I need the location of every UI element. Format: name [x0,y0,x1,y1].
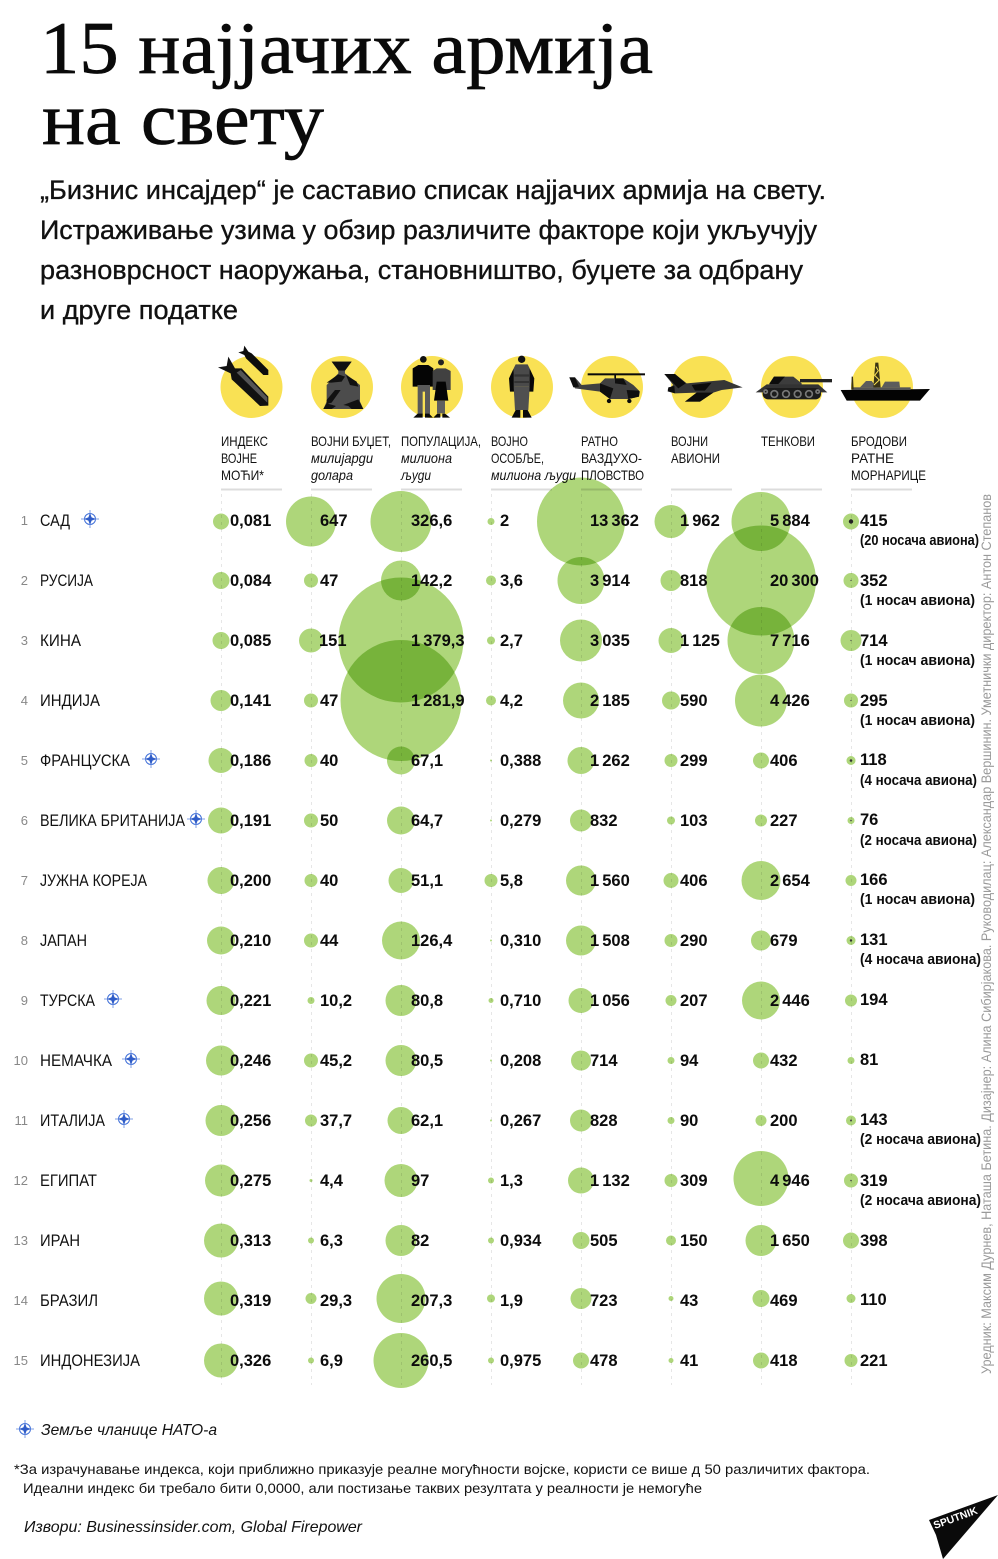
row 14: БРАЗИЛ: 469 [770,1292,798,1310]
row 13: ИРАН: 398 [860,1232,888,1250]
row 9: ТУРСКА: 194 [860,991,888,1009]
row 2: РУСИЈА [21,571,975,609]
bubbles: navy [840,514,862,1367]
row 5: ФРАНЦУСКА: 0,186 [230,752,271,770]
icon: warship [841,363,930,401]
header: navy: МОРНАРИЦЕ [851,467,926,483]
row 9: ТУРСКА: 2 446 [770,992,810,1010]
row 4: ИНДИЈА: 47 [320,692,338,710]
row 10: НЕМАЧКА: 80,5 [411,1052,443,1070]
row 12: ЕГИПАТ: 319 [860,1172,888,1190]
row 4: ИНДИЈА: ИНДИЈА [40,691,101,710]
header: navy [851,433,926,483]
row 7: ЈУЖНА КОРЕЈА: 51,1 [411,872,443,890]
header: air force: ВАЗДУХО- [581,450,642,466]
row 14: БРАЗИЛ: 29,3 [320,1292,352,1310]
bubbles: military personnel [484,518,498,1364]
row 9: ТУРСКА: ТУРСКА [40,991,96,1010]
row 4: ИНДИЈА: 0,141 [230,692,271,710]
bubbles: air force [537,478,625,1368]
row 15: ИНДОНЕЗИЈА: 221 [860,1352,888,1370]
header: personnel: милиона људи [491,467,576,483]
row 8: ЈАПАН: 126,4 [411,932,453,950]
row 9: ТУРСКА: 9 [21,993,28,1008]
row 12: ЕГИПАТ: 4,4 [320,1172,344,1190]
row 1: САД: САД [40,511,70,530]
row 3: КИНА [21,631,975,669]
row 8: ЈАПАН: ЈАПАН [40,931,87,950]
icon: helicopter [569,373,645,403]
row 5: ФРАНЦУСКА: 0,388 [500,752,541,770]
row 15: ИНДОНЕЗИЈА: 6,9 [320,1352,343,1370]
row 13: ИРАН: 505 [590,1232,618,1250]
row 12: ЕГИПАТ: 309 [680,1172,708,1190]
row 14: БРАЗИЛ: 723 [590,1292,618,1310]
row 11: ИТАЛИЈА: 0,256 [230,1112,271,1130]
row 9: ТУРСКА: 207 [680,992,708,1010]
row 2: РУСИЈА: 3,6 [500,572,523,590]
row 4: ИНДИЈА: 4,2 [500,692,523,710]
row 2: РУСИЈА: (1 носач авиона) [860,592,975,609]
row 14: БРАЗИЛ: БРАЗИЛ [40,1291,98,1310]
row 8: ЈАПАН: 8 [21,933,28,948]
row 10: НЕМАЧКА: 81 [860,1051,878,1069]
row 5: ФРАНЦУСКА [21,750,977,789]
row 6: ВЕЛИКА БРИТАНИЈА: 103 [680,812,708,830]
icon: yellow circle backgrounds [220,356,913,418]
row 10: НЕМАЧКА: НЕМАЧКА [40,1051,113,1070]
row 15: ИНДОНЕЗИЈА: 478 [590,1352,618,1370]
bubbles: military budget [286,496,336,1364]
icon: NATO member [122,1050,140,1068]
row 8: ЈАПАН: 131 [860,931,888,949]
row 3: КИНА: 3 [21,633,28,648]
row 15: ИНДОНЕЗИЈА [14,1351,888,1370]
row 6: ВЕЛИКА БРИТАНИЈА: 64,7 [411,812,443,830]
row 3: КИНА: 714 [860,632,888,650]
row 13: ИРАН: ИРАН [40,1231,80,1250]
row 12: ЕГИПАТ: 4 946 [770,1172,810,1190]
header: personnel: ВОЈНО [491,433,528,449]
row 6: ВЕЛИКА БРИТАНИЈА: 227 [770,812,798,830]
row 12: ЕГИПАТ [14,1171,981,1209]
row 11: ИТАЛИЈА: ИТАЛИЈА [40,1111,106,1130]
row 9: ТУРСКА: 80,8 [411,992,443,1010]
row 1: САД: 1 962 [680,512,720,530]
row 3: КИНА: (1 носач авиона) [860,652,975,669]
icon: NATO member [142,750,160,768]
bubbles: tanks [706,492,816,1368]
row 10: НЕМАЧКА: 714 [590,1052,618,1070]
icon: NATO member [81,510,99,528]
row 7: ЈУЖНА КОРЕЈА: 166 [860,871,888,889]
row 7: ЈУЖНА КОРЕЈА: 5,8 [500,872,523,890]
row 8: ЈАПАН: 290 [680,932,708,950]
row 12: ЕГИПАТ: 0,275 [230,1172,271,1190]
header: aircraft: ВОЈНИ [671,433,708,449]
row 11: ИТАЛИЈА: 143 [860,1111,888,1129]
row 6: ВЕЛИКА БРИТАНИЈА: 50 [320,812,338,830]
row 7: ЈУЖНА КОРЕЈА: 40 [320,872,338,890]
row 1: САД: 647 [320,512,348,530]
bubbles: military power index [204,514,238,1378]
row 7: ЈУЖНА КОРЕЈА: 1 560 [590,872,630,890]
row 4: ИНДИЈА: 2 185 [590,692,630,710]
row 13: ИРАН: 0,313 [230,1232,271,1250]
legend: NATO members: Земље чланице НАТО-а [41,1422,217,1439]
row 9: ТУРСКА: 1 056 [590,992,630,1010]
row 8: ЈАПАН: 0,210 [230,932,271,950]
column headers [221,433,926,483]
row 12: ЕГИПАТ: 1,3 [500,1172,523,1190]
row 13: ИРАН: 6,3 [320,1232,343,1250]
row 1: САД: 415 [860,512,888,530]
row 12: ЕГИПАТ: 1 132 [590,1172,630,1190]
row 11: ИТАЛИЈА: 90 [680,1112,698,1130]
row 8: ЈАПАН [21,931,981,968]
row 10: НЕМАЧКА: 0,246 [230,1052,271,1070]
row 5: ФРАНЦУСКА: 406 [770,752,798,770]
row 9: ТУРСКА [21,990,888,1010]
subtitle text block: и друге податке [40,295,238,325]
row 2: РУСИЈА: 818 [680,572,708,590]
header: air force: РАТНО [581,433,618,449]
row 3: КИНА: 151 [319,632,347,650]
row 8: ЈАПАН: 44 [320,932,339,950]
row 7: ЈУЖНА КОРЕЈА: ЈУЖНА КОРЕЈА [40,871,148,890]
row 6: ВЕЛИКА БРИТАНИЈА: 0,191 [230,812,271,830]
row 1: САД: 326,6 [411,512,452,530]
header: personnel [491,433,576,483]
header: index: ИНДЕКС [221,433,268,449]
icon: tank [756,377,832,399]
icon: bombs [218,346,268,406]
header: budget: долара [311,467,353,483]
row 6: ВЕЛИКА БРИТАНИЈА: 6 [21,813,28,828]
row 2: РУСИЈА: 3 914 [590,572,631,590]
bubbles: population [338,491,464,1388]
row 4: ИНДИЈА: 4 [21,693,28,708]
row 11: ИТАЛИЈА: 0,267 [500,1112,541,1130]
row 11: ИТАЛИЈА: 11 [14,1113,28,1128]
row 1: САД [21,510,979,549]
row 5: ФРАНЦУСКА: 1 262 [590,752,630,770]
header: population: милиона [401,450,452,466]
row 15: ИНДОНЕЗИЈА: 0,326 [230,1352,271,1370]
row 5: ФРАНЦУСКА: 40 [320,752,338,770]
row 11: ИТАЛИЈА: 37,7 [320,1112,352,1130]
row 13: ИРАН: 13 [14,1233,28,1248]
subtitle text block: разноврсност наоружања, становништво, буџете за одбрану [40,255,803,285]
row 8: ЈАПАН: 679 [770,932,798,950]
row 9: ТУРСКА: 0,710 [500,992,541,1010]
row 4: ИНДИЈА: 590 [680,692,708,710]
row 14: БРАЗИЛ: 110 [860,1291,887,1309]
row 1: САД: 1 [21,513,28,528]
row 4: ИНДИЈА: 295 [860,692,888,710]
row 7: ЈУЖНА КОРЕЈА: 406 [680,872,708,890]
row 11: ИТАЛИЈА: (2 носача авиона) [860,1131,981,1148]
row 13: ИРАН: 82 [411,1232,429,1250]
row 3: КИНА: 1 379,3 [411,632,465,650]
header: population: ПОПУЛАЦИЈА, [401,433,481,449]
header: personnel: ОСОБЉЕ, [491,450,544,466]
logo: Sputnik: SPUTNIK [932,1505,980,1532]
header: index: МОЋИ* [221,467,264,483]
subtitle text block: „Бизнис инсајдер“ је саставио списак најјачих армија на свету. [40,175,826,205]
header: navy: БРОДОВИ [851,433,907,449]
row 8: ЈАПАН: 1 508 [590,932,630,950]
row 3: КИНА: 7 716 [770,632,810,650]
row 11: ИТАЛИЈА: 828 [590,1112,618,1130]
row 15: ИНДОНЕЗИЈА: ИНДОНЕЗИЈА [40,1351,141,1370]
header: index [221,433,268,483]
subtitle text block [40,175,826,325]
row 3: КИНА: 0,085 [230,632,271,650]
header: population: људи [400,467,431,483]
row 5: ФРАНЦУСКА: 299 [680,752,708,770]
row 14: БРАЗИЛ: 207,3 [411,1292,452,1310]
row 11: ИТАЛИЈА: 62,1 [411,1112,443,1130]
row 2: РУСИЈА: 20 300 [770,572,819,590]
row 10: НЕМАЧКА [14,1050,878,1070]
row 2: РУСИЈА: 0,084 [230,572,272,590]
row 10: НЕМАЧКА: 10 [14,1053,28,1068]
row 14: БРАЗИЛ: 1,9 [500,1292,523,1310]
row 10: НЕМАЧКА: 0,208 [500,1052,541,1070]
header: population [400,433,481,483]
row 6: ВЕЛИКА БРИТАНИЈА: 0,279 [500,812,541,830]
row 5: ФРАНЦУСКА: ФРАНЦУСКА [40,751,131,770]
row 14: БРАЗИЛ: 0,319 [230,1292,271,1310]
footnote [14,1461,870,1496]
header: budget [311,433,391,483]
row 13: ИРАН: 150 [680,1232,708,1250]
subtitle text block: Истраживање узима у обзир различите факторе који укључују [40,215,817,245]
row 1: САД: 5 884 [770,512,811,530]
row 6: ВЕЛИКА БРИТАНИЈА: 832 [590,812,618,830]
row 6: ВЕЛИКА БРИТАНИЈА [21,810,977,849]
row 3: КИНА: КИНА [40,631,82,650]
row 1: САД: 0,081 [230,512,271,530]
row 15: ИНДОНЕЗИЈА: 418 [770,1352,798,1370]
row 4: ИНДИЈА [21,691,975,729]
icon: NATO member [104,990,122,1008]
title [40,8,653,161]
icon: money bag [323,362,363,409]
row 6: ВЕЛИКА БРИТАНИЈА: 76 [860,811,878,829]
row 8: ЈАПАН: (4 носача авиона) [860,951,981,968]
logo: Sputnik [929,1495,998,1559]
row 5: ФРАНЦУСКА: 67,1 [411,752,443,770]
icon: NATO member [187,810,205,828]
row 11: ИТАЛИЈА: 200 [770,1112,798,1130]
row 6: ВЕЛИКА БРИТАНИЈА: (2 носача авиона) [860,832,977,849]
header: budget: ВОЈНИ БУЏЕТ, [311,433,391,449]
row 5: ФРАНЦУСКА: 118 [860,751,887,769]
header: navy: РАТНЕ [851,450,894,466]
header: index: ВОЈНЕ [221,450,257,466]
row 10: НЕМАЧКА: 94 [680,1052,699,1070]
row 6: ВЕЛИКА БРИТАНИЈА: ВЕЛИКА БРИТАНИЈА [40,811,186,830]
row 12: ЕГИПАТ: ЕГИПАТ [40,1171,97,1190]
row 13: ИРАН: 1 650 [770,1232,810,1250]
footnote: *За израчунавање индекса, који приближно приказује реалне могућности војске, користи се више д 50 различитих фактора. [14,1461,870,1477]
row 12: ЕГИПАТ: 97 [411,1172,429,1190]
row 3: КИНА: 3 035 [590,632,630,650]
row 2: РУСИЈА: 142,2 [411,572,452,590]
row 3: КИНА: 1 125 [680,632,720,650]
row 2: РУСИЈА: 2 [21,573,28,588]
row 2: РУСИЈА: 352 [860,572,888,590]
icon: soldier [509,356,534,418]
icon: NATO member [115,1110,133,1128]
row 13: ИРАН: 0,934 [500,1232,542,1250]
row 15: ИНДОНЕЗИЈА: 15 [14,1353,28,1368]
row 4: ИНДИЈА: 4 426 [770,692,810,710]
header: tanks: ТЕНКОВИ [761,433,815,449]
row 7: ЈУЖНА КОРЕЈА: (1 носач авиона) [860,891,975,908]
row 9: ТУРСКА: 0,221 [230,992,271,1010]
row 15: ИНДОНЕЗИЈА: 0,975 [500,1352,541,1370]
row 4: ИНДИЈА: (1 носач авиона) [860,712,975,729]
row 4: ИНДИЈА: 1 281,9 [411,692,465,710]
row 9: ТУРСКА: 10,2 [320,992,352,1010]
row 13: ИРАН [14,1231,888,1250]
header: aircraft: АВИОНИ [671,450,720,466]
row 14: БРАЗИЛ [14,1291,887,1310]
credits (vertical): Уредник: Максим Дурнев, Наташа Бетина. Дизајнер: Алина Сибирјакова. Руководилац: Александар Вершинин. Уметнички директор: Антон Степанов [979,494,994,1374]
row 14: БРАЗИЛ: 43 [680,1292,698,1310]
row 7: ЈУЖНА КОРЕЈА: 2 654 [770,872,811,890]
header: budget: милијарди [311,450,373,466]
row 10: НЕМАЧКА: 45,2 [320,1052,352,1070]
title: 15 најјачих армија [40,8,653,90]
row 11: ИТАЛИЈА [14,1110,981,1148]
row 12: ЕГИПАТ: (2 носача авиона) [860,1192,981,1209]
icon: people [413,356,451,418]
header: aircraft [671,433,720,466]
row 5: ФРАНЦУСКА: (4 носача авиона) [860,772,977,789]
title: на свету [42,79,324,161]
row 15: ИНДОНЕЗИЈА: 260,5 [411,1352,452,1370]
row 1: САД: 13 362 [590,512,639,530]
row 12: ЕГИПАТ: 12 [14,1173,28,1188]
icon: fighter jet [664,374,743,402]
footnote: Идеални индекс би требало бити 0,0000, али постизање таквих резултата у реалности је немогуће [23,1480,702,1496]
row 10: НЕМАЧКА: 432 [770,1052,798,1070]
row 2: РУСИЈА: РУСИЈА [40,571,94,590]
row 7: ЈУЖНА КОРЕЈА [21,871,975,908]
row 14: БРАЗИЛ: 14 [14,1293,28,1308]
row 1: САД: 2 [500,512,509,530]
row 3: КИНА: 2,7 [500,632,523,650]
bubbles: aircraft [654,505,688,1363]
aircraft carriers note: (20 носача авиона) [860,532,979,549]
header: air force [581,433,644,483]
sources: Извори: Businessinsider.com, Global Firepower [24,1519,363,1536]
row 2: РУСИЈА: 47 [320,572,338,590]
row 15: ИНДОНЕЗИЈА: 41 [680,1352,698,1370]
row 5: ФРАНЦУСКА: 5 [21,753,28,768]
row 7: ЈУЖНА КОРЕЈА: 0,200 [230,872,271,890]
row 8: ЈАПАН: 0,310 [500,932,541,950]
row 7: ЈУЖНА КОРЕЈА: 7 [21,873,28,888]
header: air force: ПЛОВСТВО [581,467,644,483]
